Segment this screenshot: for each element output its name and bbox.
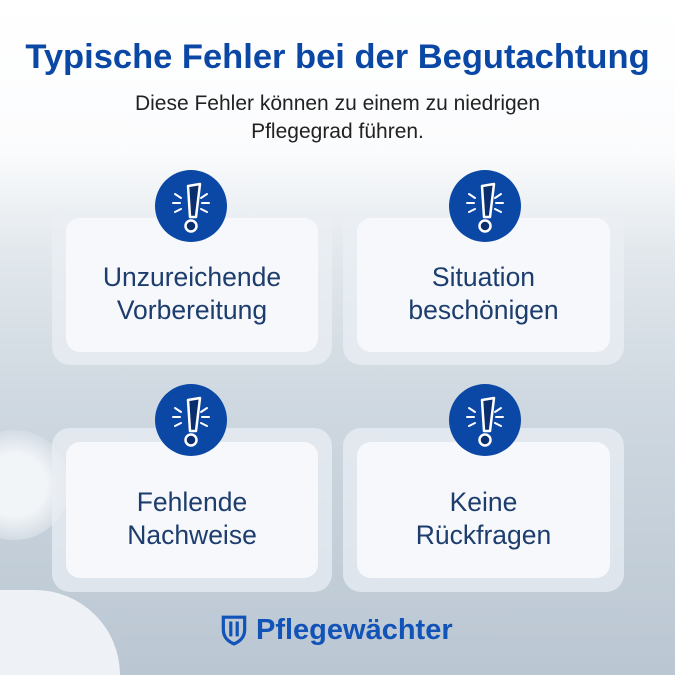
- subtitle: [135, 92, 540, 143]
- panel: Fehlende Nachweise: [52, 384, 332, 592]
- panel: Keine Rückfragen: [343, 384, 624, 592]
- panel: Situation beschönigen: beschönigen: [408, 295, 559, 325]
- panel: Fehlende Nachweise: Nachweise: [127, 520, 257, 550]
- icon: exclamation: [449, 384, 521, 456]
- panel: Keine Rückfragen: Rückfragen: [416, 520, 551, 550]
- subtitle: Diese Fehler können zu einem zu niedrigen: [135, 92, 540, 115]
- decorative glass: [0, 430, 70, 540]
- panel: Keine Rückfragen: Keine: [450, 487, 517, 517]
- panel: Situation beschönigen: Situation: [432, 262, 535, 292]
- panel: Unzureichende Vorbereitung: Vorbereitung: [117, 295, 267, 325]
- icon: shield: [222, 616, 246, 646]
- title: Typische Fehler bei der Begutachtung: [25, 38, 650, 76]
- icon: exclamation: [155, 384, 227, 456]
- panel: Unzureichende Vorbereitung: Unzureichende: [103, 262, 281, 292]
- icon: exclamation: [449, 170, 521, 242]
- icon: exclamation: [155, 170, 227, 242]
- panel: Fehlende Nachweise: Fehlende: [137, 487, 247, 517]
- panel: Situation beschönigen: [343, 170, 624, 365]
- logo: Pflegewächter: [256, 614, 453, 646]
- subtitle: Pflegegrad führen.: [251, 120, 424, 143]
- panel: Unzureichende Vorbereitung: [52, 170, 332, 365]
